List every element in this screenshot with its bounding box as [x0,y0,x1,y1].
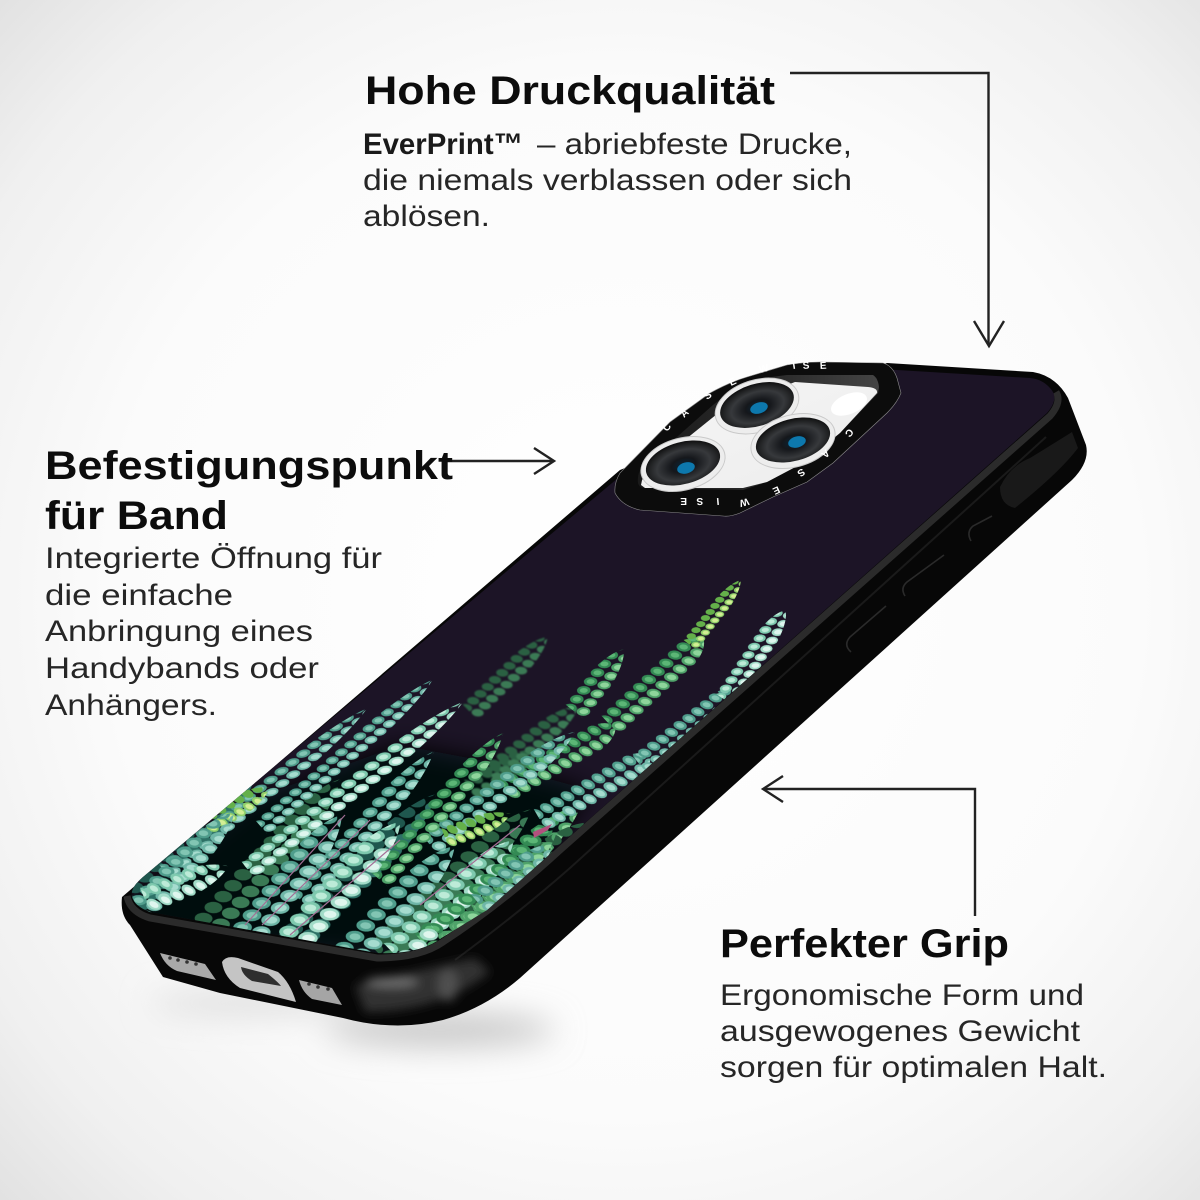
front bottom fronds [132,814,234,912]
port [222,957,296,1002]
camera opening wall [638,375,879,490]
description: ausgewogenes Gewicht [720,1015,1081,1048]
mid fronds [427,732,574,852]
description [45,542,382,722]
description [720,979,1107,1084]
case body [122,363,1087,1026]
speaker left [160,953,216,980]
description: sorgen für optimalen Halt. [720,1051,1107,1084]
bottom ports [160,953,342,1005]
description: die einfache [45,579,233,612]
camera bump [615,362,901,516]
description [363,128,852,233]
description: Anhängers. [45,689,217,722]
bump lettering bottom: CASEWISE [680,426,855,508]
heading [45,444,453,538]
strap attachment recess [1000,432,1078,508]
case rim highlight [127,392,1058,958]
text block: print quality [363,69,852,233]
description: – abriebfeste Drucke, [537,128,852,161]
side buttons [847,516,992,652]
heading: für Band [45,494,228,538]
description: Ergonomische Form und [720,979,1084,1012]
heading: Befestigungspunkt [45,444,453,488]
lens top [708,369,806,443]
description: die niemals verblassen oder sich [363,164,852,197]
back bottom fronds [132,786,252,910]
camera module [615,360,901,516]
heading: Hohe Druckqualität [365,69,775,113]
green top fronds [499,723,616,800]
description: Handybands oder [45,652,319,685]
description: ablösen. [363,200,490,233]
dim fronds [462,637,578,798]
speaker right [299,980,342,1005]
dark foliage shadow [120,745,590,960]
phone drop shadow [150,991,555,1046]
corner reflection [355,958,490,1012]
description: Anbringung eines [45,615,313,648]
description: Integrierte Öffnung für [45,542,382,575]
heading: Perfekter Grip [720,922,1009,966]
camera opening white [641,382,877,488]
lime accents [206,787,270,832]
screen back panel [132,369,1054,953]
pink stems [245,815,520,935]
flash [828,388,870,420]
arrow: print quality [790,73,1004,346]
arrow: strap attachment [445,448,554,474]
phone case [98,360,1087,1026]
description: EverPrint™ [363,128,523,161]
text block: grip [720,922,1107,1084]
plant print [132,580,786,954]
left fronds [159,701,373,880]
bump lettering top: CASEWISE [661,360,827,434]
lens left [635,428,731,500]
text block: strap attachment [45,444,453,722]
teal right fronds [534,753,650,828]
pink leaf accent [533,824,552,838]
lens right [745,405,841,477]
side inner groove [455,437,1046,960]
arrow: grip [763,776,975,916]
